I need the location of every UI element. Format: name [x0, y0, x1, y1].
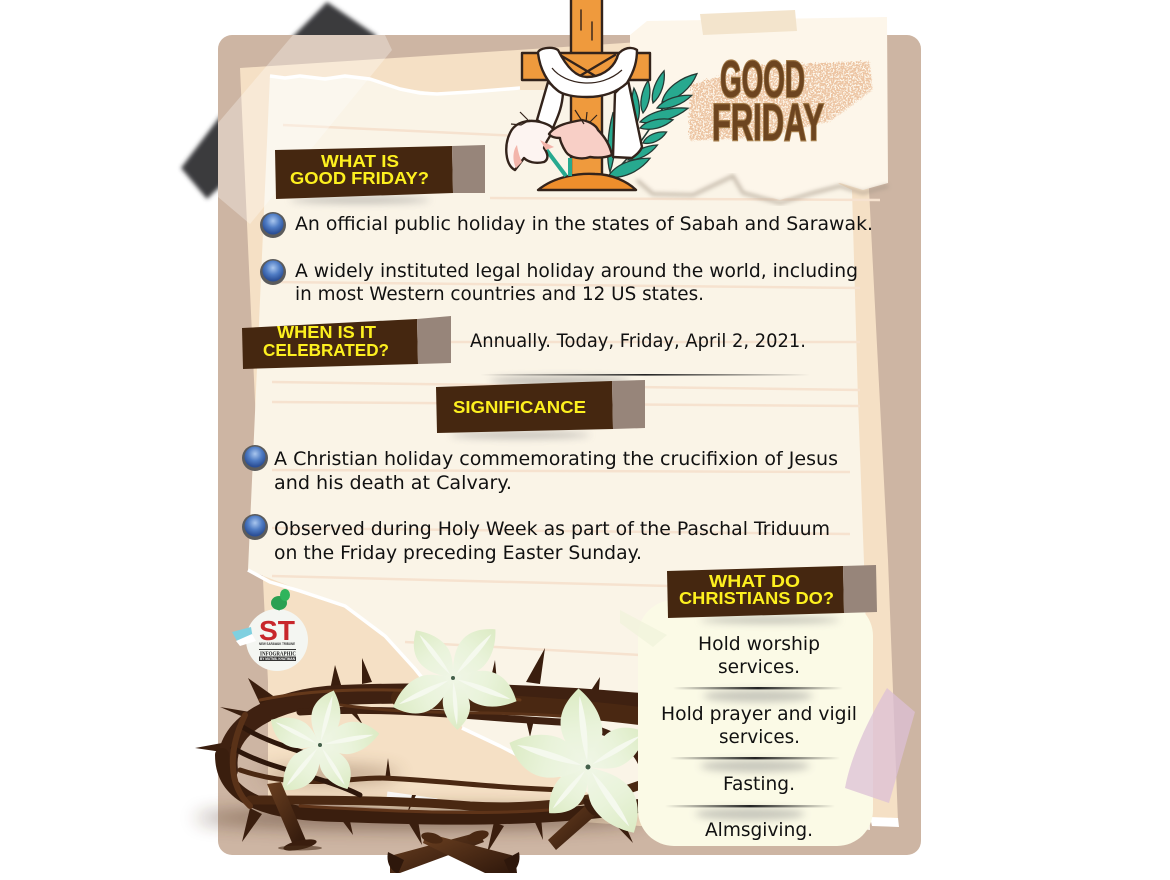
green tape: [620, 610, 667, 647]
cream torn main paper: [248, 75, 870, 830]
text: holy week: Observed during Holy Week as part of the Paschal Triduum: [274, 518, 830, 540]
label: significance: [436, 380, 645, 438]
lily: left: [264, 687, 382, 801]
translucent tape top left: [218, 35, 392, 224]
panel: what do Christians do: services.: [719, 726, 800, 748]
label: when is it celebrated: WHEN IS IT: [277, 322, 376, 342]
note torn shadow: [637, 176, 888, 203]
title: Good Friday: FRIDAY: [712, 94, 824, 152]
text: christian holiday: A Christian holiday commemorating the crucifixion of Jesus: [274, 448, 838, 470]
panel: what do Christians do: services.: [718, 656, 800, 678]
background board: [218, 35, 921, 855]
label: significance: SIGNIFICANCE: [453, 397, 586, 417]
panel: what do Christians do: Fasting.: [723, 773, 795, 795]
pink tape: [845, 688, 915, 803]
ST logo with pin: INFOGRAPHIC: [260, 652, 296, 658]
bullet: [242, 514, 268, 540]
ST logo with pin: ST: [259, 615, 295, 646]
label: when is it celebrated: CELEBRATED?: [263, 340, 389, 360]
mound: [538, 174, 636, 190]
label: what do Christians do: [667, 565, 877, 623]
divider: [480, 374, 810, 385]
top right note paper: [630, 17, 888, 200]
text: public holiday: An official public holiday in the states of Sabah and Sarawak.: [295, 213, 873, 235]
tape on note: [700, 10, 797, 35]
text: holy week: [274, 518, 830, 564]
text: holy week: on the Friday preceding Easter Sunday.: [274, 542, 642, 564]
cloth: [537, 82, 563, 128]
text: christian holiday: [274, 448, 838, 494]
label: when is it celebrated: [242, 316, 451, 369]
label: what do Christians do: CHRISTIANS DO?: [679, 588, 834, 608]
label: what is Good Friday: [275, 145, 485, 203]
lily: centre: [386, 617, 523, 731]
icon: cross with cloth and flowers: [506, 0, 701, 190]
title: Good Friday: GOOD: [720, 51, 805, 109]
label: what is Good Friday: GOOD FRIDAY?: [290, 168, 429, 188]
speckled splotch: [690, 62, 873, 141]
crown of thorns: [195, 648, 645, 853]
torn white edges: [248, 76, 552, 802]
text: legal holiday: in most Western countries and 12 US states.: [295, 283, 704, 305]
cross: [522, 0, 650, 178]
text: legal holiday: A widely instituted legal holiday around the world, including: [295, 260, 858, 282]
peach back paper: [240, 42, 898, 826]
white torn scrap lower right: [870, 817, 899, 827]
label: what do Christians do: WHAT DO: [709, 571, 800, 591]
black tape behind board: [181, 2, 377, 199]
title: Good Friday: [690, 51, 873, 152]
panel: what do Christians do: Hold worship: [698, 633, 820, 655]
white lily: [506, 121, 553, 170]
ST logo with pin: BY MUTMIL KHATIMAN: [260, 657, 295, 661]
text: christian holiday: and his death at Calvary.: [274, 472, 512, 494]
panel: what do Christians do: [620, 565, 877, 846]
text: legal holiday: [295, 260, 858, 305]
pink lily: [549, 120, 612, 158]
bullet: [260, 212, 286, 238]
stems: [545, 148, 570, 176]
ST logo with pin: NEW SARAWAK TRIBUNE: [259, 641, 295, 646]
bullet: [242, 445, 268, 471]
panel: what do Christians do: Hold prayer and vigil: [661, 703, 857, 725]
paper ruled lines: [272, 125, 880, 655]
ST logo with pin: [232, 589, 308, 671]
thorns: [195, 648, 633, 853]
bullet: [260, 259, 286, 285]
lily: right: [503, 686, 654, 843]
palm: [606, 69, 701, 182]
label: what is Good Friday: WHAT IS: [321, 151, 399, 171]
stamens: [511, 110, 597, 125]
panel: what do Christians do: Almsgiving.: [705, 819, 813, 841]
nails: [267, 782, 599, 874]
text: annual date: Annually. Today, Friday, April 2, 2021.: [470, 330, 806, 352]
